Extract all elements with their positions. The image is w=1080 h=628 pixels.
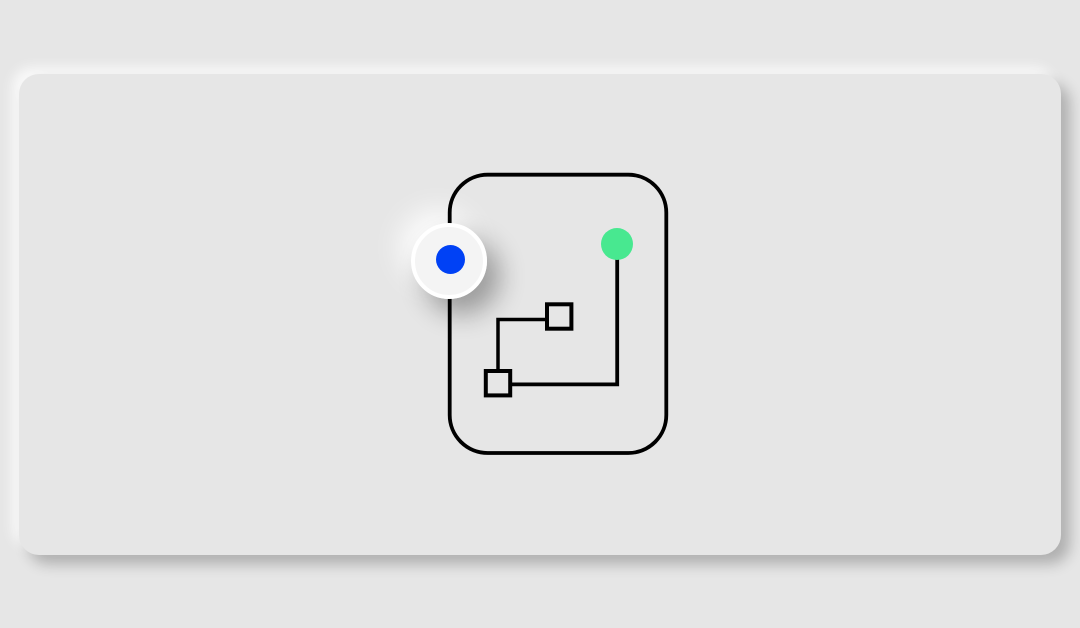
knob shadow and glow xyxy=(411,222,487,298)
node: lower square xyxy=(486,371,510,395)
blue dot xyxy=(436,245,465,274)
connector: green dot to lower square xyxy=(510,258,617,384)
icon: green dot xyxy=(601,228,633,260)
rounded document outline xyxy=(450,175,666,453)
icon: blue dot toggle knob xyxy=(411,222,487,298)
connector: lower square to upper square xyxy=(498,320,547,371)
panel: raised card xyxy=(19,74,1061,555)
node: upper square xyxy=(547,304,571,329)
